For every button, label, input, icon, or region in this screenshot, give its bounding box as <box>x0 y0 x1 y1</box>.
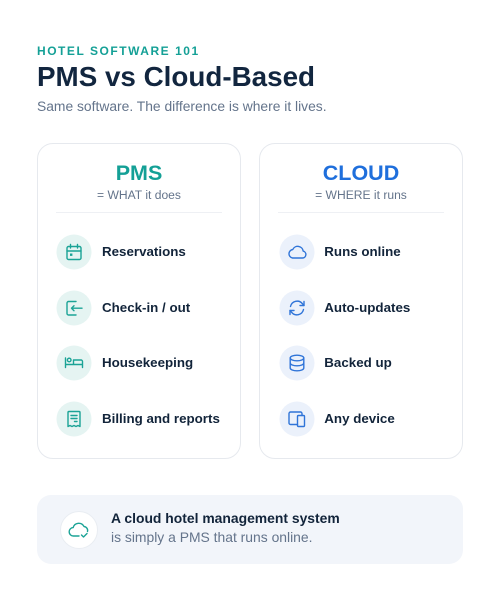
row: Auto-updates <box>280 290 410 326</box>
row: Auto-updates: Auto-updates <box>324 300 410 314</box>
row: Any device: Any device <box>324 410 395 426</box>
row: Housekeeping: Housekeeping <box>102 355 193 370</box>
PMS subheading: = WHAT it does <box>97 188 181 202</box>
callout heading: A cloud hotel management system <box>111 510 340 526</box>
Cloud heading: CLOUD <box>323 161 399 185</box>
callout panel <box>37 495 463 564</box>
row: Reservations <box>56 234 186 270</box>
callout text: is simply a PMS that runs online. <box>111 529 312 545</box>
row: Any device <box>280 402 395 436</box>
row: Billing and reports: Billing and reports <box>102 410 220 426</box>
icon: cloud check <box>60 511 98 548</box>
row: Check-in / out <box>56 290 190 326</box>
row: Backed up: Backed up <box>324 355 392 370</box>
row: Runs online <box>280 234 401 270</box>
panel: Cloud <box>259 143 463 458</box>
row: Housekeeping <box>56 346 193 380</box>
row: Runs online: Runs online <box>324 244 401 259</box>
row: Billing and reports <box>56 402 220 436</box>
subtitle: Same software. The difference is where it lives. <box>37 98 327 114</box>
title: PMS vs Cloud-Based <box>37 61 315 92</box>
PMS heading: PMS <box>116 161 162 185</box>
Cloud subheading: = WHERE it runs <box>315 188 407 202</box>
panel: PMS <box>37 143 241 458</box>
row: Check-in / out: Check-in / out <box>102 300 190 314</box>
row: Reservations: Reservations <box>102 244 186 259</box>
row: Backed up <box>280 346 392 380</box>
eyebrow: HOTEL SOFTWARE 101 <box>37 44 200 58</box>
